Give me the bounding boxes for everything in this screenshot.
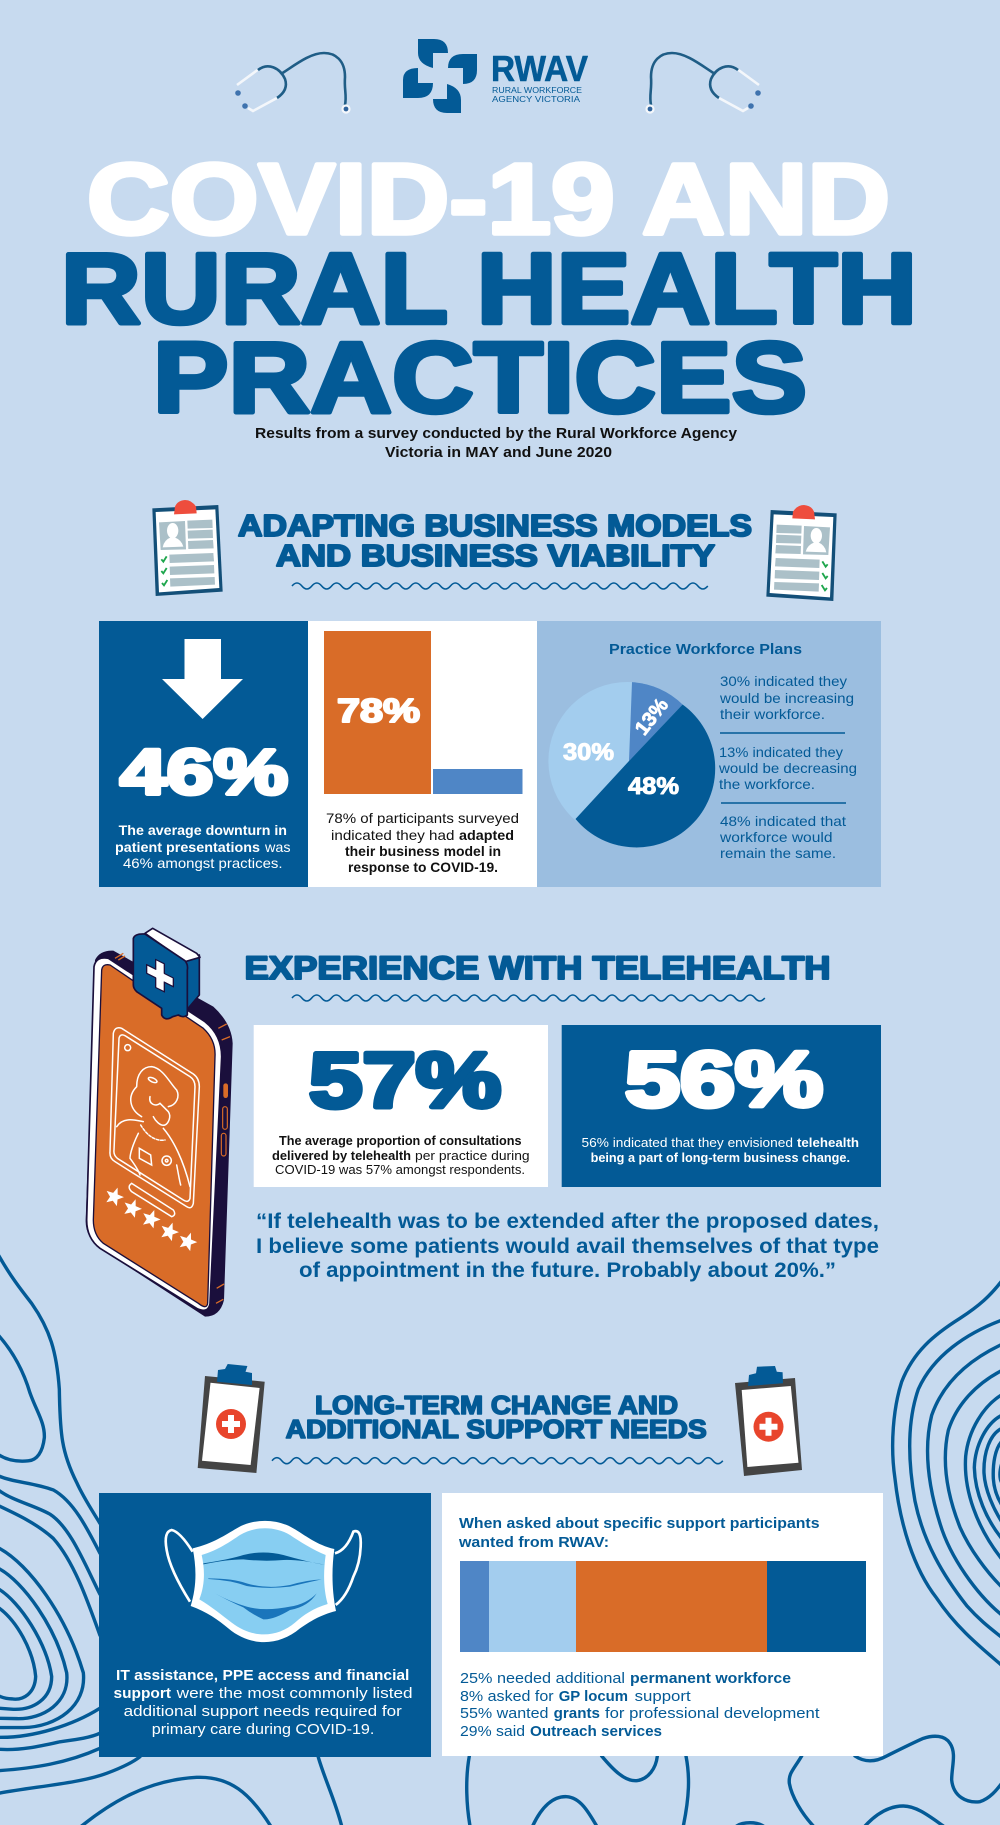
title line 1: COVID-19 AND: [87, 144, 890, 256]
heading: experience with telehealth: EXPERIENCE WITH TELEHEALTH: [244, 950, 830, 986]
panel text: [272, 1134, 530, 1177]
logo: RWAV: AGENCY VICTORIA: [492, 94, 580, 104]
panel text: [114, 1667, 413, 1738]
stat: 57%: 57%: [309, 1036, 501, 1124]
legend text: 48%: remain the same.: [720, 845, 836, 861]
legend text: 48%: 48% indicated that: [720, 813, 846, 829]
quote: “If telehealth was to be extended after the proposed dates,: [256, 1209, 879, 1233]
panel: support needs: [99, 1493, 431, 1757]
contour lines background: bottom left: [0, 1748, 470, 1825]
panel text: The average proportion of consultations: [279, 1134, 522, 1148]
list of support needs: Outreach services: [530, 1723, 662, 1740]
list of support needs: 8% asked for: [460, 1688, 554, 1705]
panel: support wanted from RWAV: [442, 1493, 883, 1756]
pie chart: [548, 682, 715, 847]
panel: adapted business model 78%: [308, 621, 537, 887]
panel: downturn 46%: [99, 621, 308, 887]
icon: red cross clipboard left: [198, 1364, 265, 1473]
panel: practice workforce plans: [537, 621, 881, 887]
logo wordmark: RWAV: [491, 48, 588, 89]
logo mark: [403, 39, 477, 113]
panel text: adapted: [459, 827, 514, 843]
quote: I believe some patients would avail themselves of that type: [256, 1234, 879, 1258]
icon: down arrow: [162, 639, 243, 719]
panel heading: Practice Workforce Plans: [609, 641, 802, 658]
panel text: COVID-19 was 57% amongst respondents.: [275, 1163, 525, 1177]
panel text: indicated they had: [331, 827, 454, 843]
icon: clipboard right: [766, 505, 837, 601]
panel text: per practice during: [415, 1149, 530, 1163]
list of support needs: grants: [554, 1705, 600, 1722]
quote: [256, 1209, 879, 1282]
subtitle: Victoria in MAY and June 2020: [385, 445, 612, 461]
pie label 13%: 13%: [631, 694, 673, 740]
stat: 46%: 46%: [120, 736, 288, 808]
quote: of appointment in the future. Probably about 20%.”: [299, 1258, 836, 1282]
list of support needs: permanent workforce: [630, 1670, 791, 1687]
panel text: response to COVID-19.: [348, 859, 498, 875]
legend text: 13%: would be decreasing: [718, 760, 857, 776]
logo: RWAV: [403, 39, 588, 113]
panel text: 78% of participants surveyed: [326, 810, 519, 826]
panel text: their business model in: [345, 843, 501, 859]
legend text: 48%: [719, 813, 846, 861]
list of support needs: 25% needed additional: [460, 1670, 625, 1687]
panel text: The average downturn in: [119, 822, 287, 838]
panel heading: When asked about specific support participants: [459, 1515, 820, 1532]
stacked bar chart: [460, 1561, 866, 1652]
subtitle: [255, 426, 738, 461]
icon: stethoscope right: [645, 53, 761, 114]
panel text: 46% amongst practices.: [123, 855, 282, 871]
legend text: 30%: their workforce.: [720, 706, 825, 722]
list of support needs: 55% wanted: [460, 1705, 548, 1722]
bar: 78%: [324, 631, 431, 794]
legend text: 30%: would be increasing: [719, 690, 854, 706]
title line 3: PRACTICES: [153, 322, 807, 434]
legend text: 13%: 13% indicated they: [719, 744, 843, 760]
panel heading: [458, 1515, 820, 1551]
heading: adapting business models: ADAPTING BUSINESS MODELS: [238, 509, 752, 543]
legend text: 48%: workforce would: [719, 829, 832, 845]
panel text: were the most commonly listed: [176, 1685, 413, 1702]
panel text: [582, 1136, 859, 1165]
panel heading: wanted from RWAV:: [458, 1534, 609, 1551]
panel: 57% consultations: [254, 1025, 548, 1187]
panel text: being a part of long-term business change.: [591, 1151, 850, 1165]
panel text: [326, 810, 519, 875]
panel text: support: [114, 1685, 171, 1702]
list of support needs: support: [635, 1688, 692, 1705]
icon: face mask: [166, 1521, 361, 1642]
pie label 30%: 30%: [563, 739, 614, 766]
panel text: IT assistance, PPE access and financial: [116, 1667, 409, 1684]
panel text: 56% indicated that they envisioned: [582, 1136, 793, 1150]
panel text: [115, 822, 290, 871]
list of support needs: for professional development: [605, 1705, 820, 1722]
legend text: 13%: [718, 744, 857, 792]
contour lines background: right: [893, 1281, 1000, 1665]
panel text: patient presentations: [115, 839, 260, 855]
title: [61, 144, 917, 434]
legend text: 13%: the workforce.: [719, 776, 815, 792]
heading: adapting business models: AND BUSINESS VIABILITY: [276, 539, 715, 573]
stat: 78%: 78%: [337, 692, 420, 729]
list of support needs: 29% said: [460, 1723, 525, 1740]
heading: long-term change: [286, 1392, 707, 1444]
icon: phone with telehealth doctor: [86, 928, 233, 1317]
panel: 56% long-term change: [562, 1025, 881, 1187]
contour lines background: bottom right: [533, 1736, 1000, 1825]
panel text: delivered by telehealth: [272, 1149, 411, 1163]
list of support needs: [460, 1670, 820, 1740]
heading: adapting business models: [238, 509, 752, 573]
bar: remainder: [433, 769, 522, 794]
legend text: 30%: [719, 673, 854, 722]
icon: red cross clipboard right: [735, 1366, 802, 1476]
stat: 56%: 56%: [625, 1035, 823, 1123]
legend text: 30%: 30% indicated they: [720, 673, 847, 689]
icon: stethoscope left: [235, 53, 351, 114]
icon: medical chat bubble: [133, 928, 200, 1019]
panel text: was: [264, 839, 290, 855]
title line 2: RURAL HEALTH: [61, 233, 917, 345]
icon: clipboard left: [152, 500, 223, 596]
list of support needs: GP locum: [559, 1688, 628, 1705]
panel text: telehealth: [797, 1136, 859, 1150]
subtitle: Results from a survey conducted by the Rural Workforce Agency: [255, 426, 738, 442]
panel text: additional support needs required for: [124, 1703, 402, 1720]
logo sub text: RURAL WORKFORCE: [492, 85, 582, 95]
heading: long-term change: ADDITIONAL SUPPORT NEEDS: [286, 1416, 707, 1444]
pie label 48%: 48%: [628, 773, 679, 800]
panel text: primary care during COVID-19.: [152, 1721, 374, 1738]
contour lines background: left: [0, 1255, 100, 1750]
heading: long-term change: LONG-TERM CHANGE AND: [315, 1392, 678, 1420]
